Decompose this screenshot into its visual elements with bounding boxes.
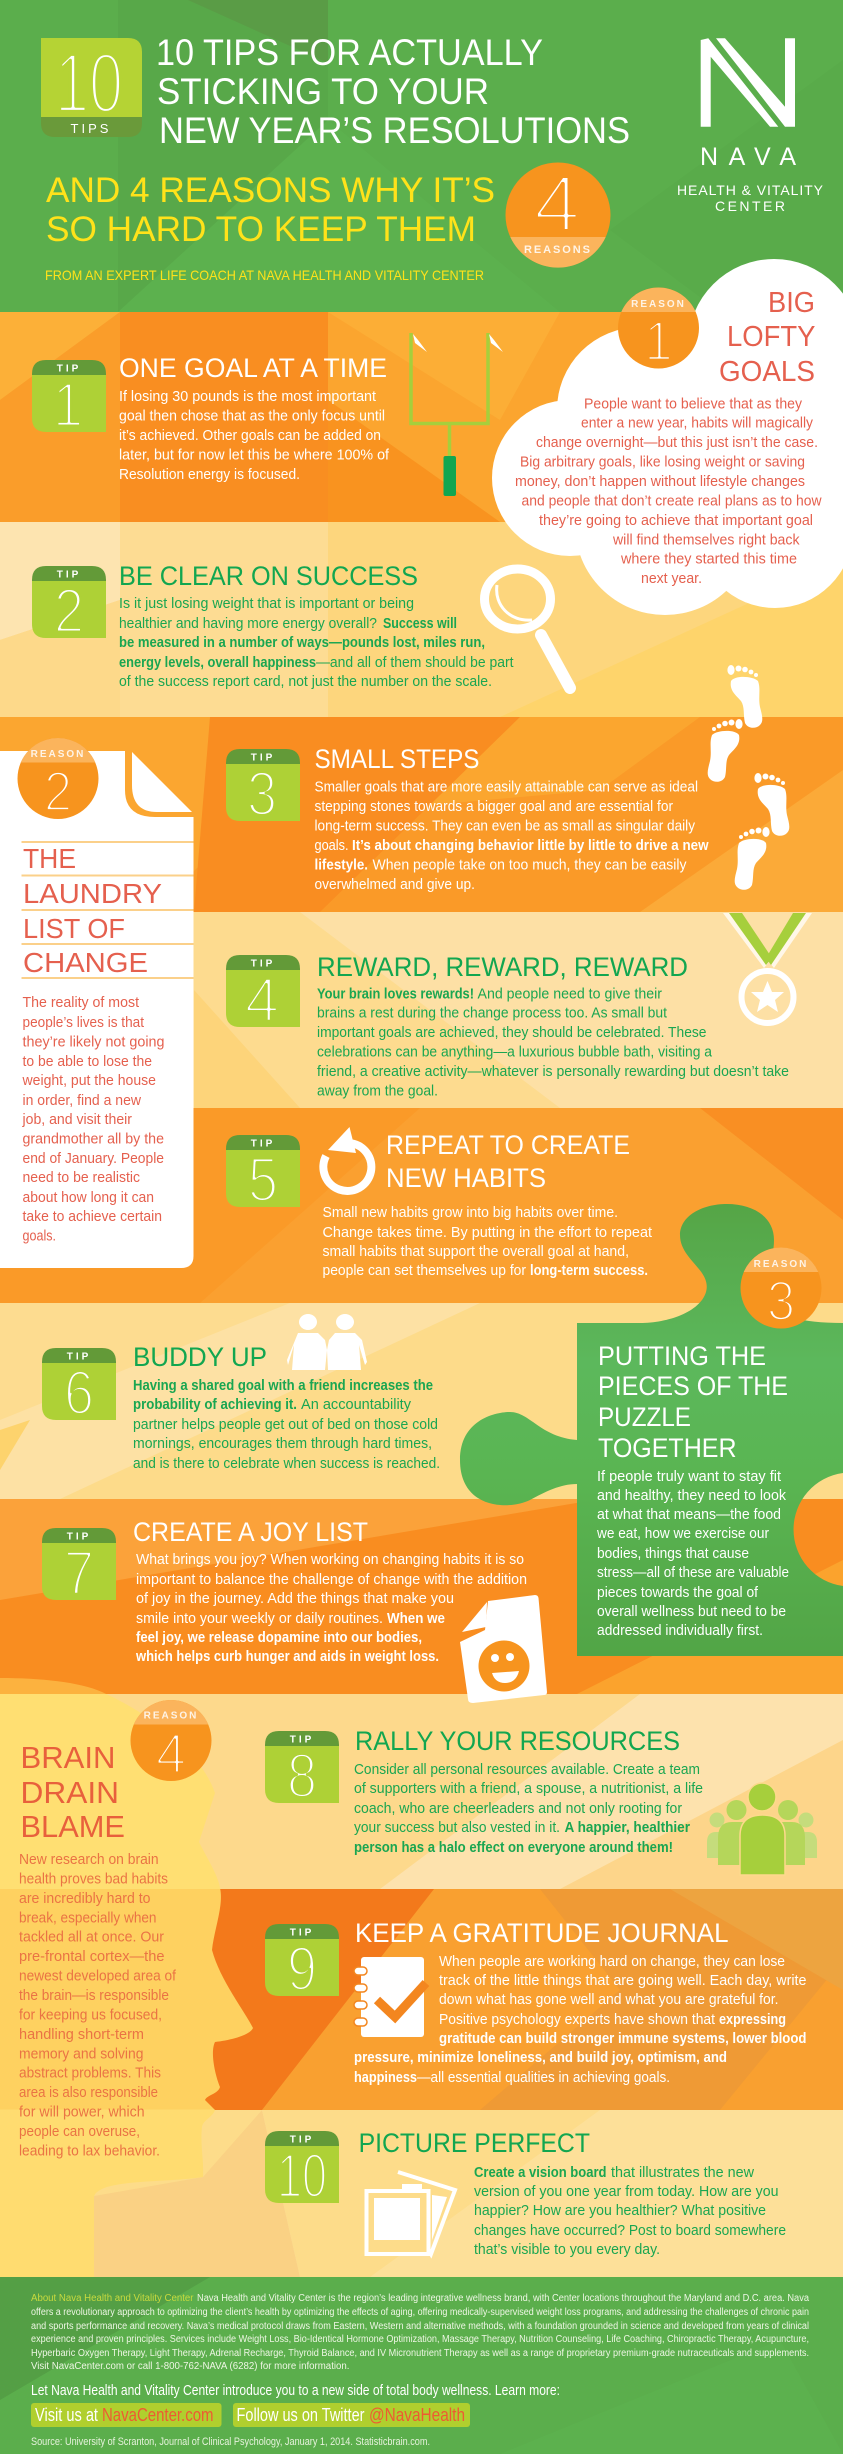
panel: tip 8 bbox=[265, 1726, 817, 1875]
reason 2 title: THE bbox=[23, 843, 76, 874]
byline: FROM AN EXPERT LIFE COACH AT NAVA HEALTH AND VITALITY CENTER bbox=[45, 267, 484, 283]
reason 4 text: for will power, which bbox=[19, 2105, 145, 2121]
title bbox=[156, 32, 630, 151]
panel: footer bbox=[31, 2293, 809, 2448]
panel: tip 3 bbox=[226, 744, 709, 893]
reason 4 title: BRAIN bbox=[20, 1740, 116, 1775]
tip 2 text: Success will bbox=[383, 616, 457, 632]
tip 9 text: happiness bbox=[354, 2070, 417, 2086]
tip 8 tile: TIP bbox=[290, 1734, 314, 1746]
tip 2 tile bbox=[32, 566, 106, 646]
tip 3 tile bbox=[226, 749, 300, 829]
logo: Nava: HEALTH & VITALITY bbox=[677, 182, 824, 198]
logo: Nava: NAVA bbox=[700, 143, 796, 171]
tip 4 text: away from the goal. bbox=[317, 1083, 438, 1099]
panel: tip 9 bbox=[265, 1918, 806, 2086]
tip 6 text: mornings, encourages them through hard times, bbox=[133, 1436, 432, 1452]
reason 2 text: take to achieve certain bbox=[22, 1209, 162, 1225]
reason 2 badge bbox=[18, 738, 98, 822]
tip 7 text: which helps curb hunger and aids in weight loss. bbox=[135, 1649, 439, 1665]
tip 6 text: partner helps people get out of bed on those cold bbox=[133, 1417, 438, 1433]
tip 6 tile: TIP bbox=[67, 1352, 91, 1362]
tip 1 tile: TIP bbox=[57, 364, 81, 374]
tip 9 text: down what has gone well and what you are grateful for. bbox=[439, 1992, 778, 2008]
tip 8 text: coach, who are cheerleaders and not only rooting for bbox=[354, 1801, 682, 1817]
tip 1 text: Resolution energy is focused. bbox=[119, 467, 300, 483]
reason 3 title: PUTTING THE bbox=[598, 1341, 766, 1371]
tip 8 text: Consider all personal resources available. Create a team bbox=[354, 1762, 700, 1778]
tip 7 tile: TIP bbox=[67, 1532, 91, 1542]
reason 4 text: the brain—is responsible bbox=[19, 1988, 169, 2004]
subtitle bbox=[46, 171, 495, 249]
tip 7 text bbox=[135, 1552, 527, 1665]
source line: Source: University of Scranton, Journal of Clinical Psychology, January 1, 2014. Statisticbrain.com. bbox=[31, 2436, 430, 2448]
cloud title: LOFTY bbox=[727, 321, 816, 353]
tip 7 text: of joy in the journey. Add the things that make you bbox=[136, 1591, 454, 1607]
cloud body text: and people that don’t create real plans as to how bbox=[522, 494, 822, 510]
reason 2 title bbox=[23, 843, 162, 978]
tip 9 text: pressure, minimize loneliness, and build joy, optimism, and bbox=[354, 2050, 727, 2066]
cloud body text: money, don’t happen without lifestyle changes bbox=[515, 474, 805, 490]
tip 5 text: people can set themselves up for bbox=[322, 1263, 526, 1279]
tip 2 text: healthier and having more energy overall? bbox=[119, 616, 377, 632]
tip 6 heading: BUDDY UP bbox=[133, 1342, 267, 1372]
reason 3 text: If people truly want to stay fit bbox=[597, 1469, 781, 1485]
reason 2 text: to be able to lose the bbox=[22, 1054, 152, 1070]
tip 8 tile bbox=[265, 1731, 339, 1811]
icon: two buddies bbox=[287, 1314, 367, 1370]
reason 2 text: weight, put the house bbox=[22, 1073, 156, 1089]
reason 2 text: The reality of most bbox=[22, 995, 139, 1011]
button: follow on twitter: @NavaHealth bbox=[369, 2405, 465, 2425]
reason 2 text: in order, find a new bbox=[22, 1093, 142, 1109]
logo: Nava bbox=[677, 38, 824, 214]
panel: tip 7 bbox=[42, 1517, 547, 1703]
reason 2 text: job, and visit their bbox=[22, 1112, 132, 1128]
tip 6 tile: 6 bbox=[64, 1359, 94, 1428]
icon: smiley page bbox=[460, 1595, 547, 1703]
tip 8 text: person has a halo effect on everyone around them! bbox=[354, 1840, 673, 1856]
reason 3 text: stress—all of these are valuable bbox=[597, 1565, 789, 1581]
tip 4 text: Your brain loves rewards! bbox=[317, 986, 474, 1002]
tip 9 text: gratitude can build stronger immune systems, lower blood bbox=[439, 2031, 806, 2047]
subtitle: SO HARD TO KEEP THEM bbox=[46, 210, 476, 249]
tip 6 text bbox=[133, 1378, 440, 1472]
about text: About Nava Health and Vitality Center bbox=[31, 2293, 194, 2304]
tip 5 text: long-term success. bbox=[530, 1263, 648, 1279]
tip 5 heading bbox=[386, 1130, 630, 1193]
icon: 10 tips tile: 10 bbox=[55, 36, 123, 130]
tip 3 text: Smaller goals that are more easily attainable can serve as ideal bbox=[314, 780, 698, 796]
tip 5 tile bbox=[226, 1135, 300, 1215]
tip 4 text: brains a rest during the change process too. As small but bbox=[317, 1006, 667, 1022]
panel: tip 2 bbox=[32, 561, 570, 690]
tip 10 text: happier? How are you healthier? What positive bbox=[474, 2203, 766, 2219]
tip 3 text: overwhelmed and give up. bbox=[314, 877, 475, 893]
reason 4 title: DRAIN bbox=[20, 1775, 119, 1810]
tip 5 text bbox=[322, 1205, 652, 1279]
tip 10 heading: PICTURE PERFECT bbox=[359, 2128, 590, 2158]
reason 3 title: TOGETHER bbox=[598, 1433, 736, 1463]
about text: Visit NavaCenter.com or call 1-800-762-NAVA (6282) for more information. bbox=[31, 2361, 350, 2372]
icon: repeat arrow bbox=[323, 1127, 371, 1191]
tip 1 text: later, but for now let this be where 100% of bbox=[119, 448, 390, 464]
tip 2 tile: TIP bbox=[57, 570, 81, 580]
tip 10 text: Create a vision board bbox=[474, 2165, 606, 2181]
logo: Nava: CENTER bbox=[715, 198, 785, 214]
reason 3 text: bodies, things that cause bbox=[597, 1546, 749, 1562]
tip 3 text bbox=[314, 780, 709, 893]
tip 10 text: that illustrates the new bbox=[611, 2165, 755, 2181]
tip 9 text: Positive psychology experts have shown that bbox=[439, 2012, 715, 2028]
panel: tip 4 bbox=[226, 913, 812, 1099]
reason 3 text: pieces towards the goal of bbox=[597, 1585, 759, 1601]
reason 3 badge: 3 bbox=[767, 1269, 795, 1332]
header bbox=[41, 32, 824, 283]
tip 3 text: lifestyle. bbox=[314, 858, 368, 874]
tip 9 tile bbox=[265, 1924, 339, 2004]
cloud body text: they’re going to achieve that important goal bbox=[539, 513, 813, 529]
cloud shape bbox=[492, 259, 843, 615]
tip 7 text: feel joy, we release dopamine into our bodies, bbox=[136, 1630, 422, 1646]
tip 1 text: it’s achieved. Other goals can be added on bbox=[119, 428, 381, 444]
tip 9 text: track of the little things that are going well. Each day, write bbox=[439, 1973, 806, 1989]
tip 4 tile: TIP bbox=[251, 958, 275, 970]
tip 2 text: Is it just losing weight that is important or being bbox=[119, 596, 414, 612]
tip 4 text bbox=[317, 986, 789, 1099]
reason 4 badge: REASON bbox=[144, 1710, 198, 1722]
tip 9 heading: KEEP A GRATITUDE JOURNAL bbox=[355, 1918, 728, 1948]
tip 7 tile bbox=[42, 1528, 116, 1608]
reason 4 badge: 4 bbox=[156, 1722, 186, 1784]
footprint 4 bbox=[735, 827, 770, 890]
tip 9 text: expressing bbox=[719, 2012, 786, 2028]
reason 1 badge bbox=[618, 288, 699, 372]
reason 2 text: end of January. People bbox=[22, 1151, 164, 1167]
button: visit website: Visit us at bbox=[35, 2405, 98, 2425]
tip 7 tile: 7 bbox=[64, 1539, 94, 1608]
reason 4 text: New research on brain bbox=[19, 1852, 159, 1868]
tip 6 tile bbox=[42, 1348, 116, 1428]
reason 3 text: addressed individually first. bbox=[597, 1623, 763, 1639]
icon: 10 tips tile: TIPS bbox=[71, 121, 111, 136]
footprint 3 bbox=[754, 773, 789, 836]
cloud body text: enter a new year, habits will magically bbox=[581, 416, 814, 432]
tip 5 heading: NEW HABITS bbox=[386, 1163, 546, 1193]
tip 7 text: When we bbox=[387, 1611, 445, 1627]
tip 6 text: probability of achieving it. bbox=[133, 1397, 297, 1413]
tip 3 tile: 3 bbox=[247, 760, 277, 829]
tip 3 text: It’s about changing behavior little by little to drive a new bbox=[352, 838, 709, 854]
tip 10 tile bbox=[265, 2131, 339, 2211]
tip 4 text: important goals are achieved, they should be celebrated. These bbox=[317, 1025, 706, 1041]
subtitle: AND 4 REASONS WHY IT’S bbox=[46, 171, 495, 210]
puzzle shape bbox=[460, 1204, 843, 1656]
tip 7 text: important to balance the challenge of change with the addition bbox=[136, 1572, 527, 1588]
tip 4 heading: REWARD, REWARD, REWARD bbox=[317, 952, 688, 982]
icon: footprints bbox=[708, 665, 789, 890]
reason 2 title: CHANGE bbox=[23, 947, 148, 978]
cloud title: BIG bbox=[768, 287, 815, 319]
about text: Nava Health and Vitality Center is the region’s leading integrative wellness brand, with Center locations throughout the Maryland and D.C. area. Nava bbox=[197, 2293, 809, 2304]
title: 10 TIPS FOR ACTUALLY bbox=[156, 32, 543, 73]
cloud body text: Big arbitrary goals, like losing weight or saving bbox=[520, 455, 805, 471]
reason 2 text: they’re likely not going bbox=[22, 1034, 164, 1050]
tip 2 heading: BE CLEAR ON SUCCESS bbox=[119, 561, 418, 591]
icon: team of people bbox=[707, 1783, 817, 1875]
icon: 4 reasons circle: 4 bbox=[534, 159, 580, 248]
icon: 4 reasons circle: REASONS bbox=[524, 244, 590, 256]
reason 2 text: about how long it can bbox=[22, 1190, 154, 1206]
reason 4 text: people can overuse, bbox=[19, 2124, 140, 2140]
reason 3 badge bbox=[740, 1248, 822, 1332]
tip 7 text: smile into your weekly or daily routines. bbox=[136, 1611, 383, 1627]
footprint 1 bbox=[727, 665, 762, 728]
cloud body text: where they started this time bbox=[620, 552, 797, 568]
paper sheet bbox=[0, 751, 194, 1268]
tip 3 text: long-term success. They can even be as small as singular daily bbox=[314, 818, 696, 834]
reason 2 badge: 2 bbox=[44, 760, 72, 822]
reason 4 text: area is also responsible bbox=[19, 2085, 158, 2101]
reason 2 title: LIST OF bbox=[23, 913, 125, 944]
tip 1 heading: ONE GOAL AT A TIME bbox=[119, 353, 387, 383]
about text bbox=[31, 2293, 809, 2372]
panel: brain drain head silhouette bbox=[0, 1678, 300, 2277]
reason 4 title bbox=[20, 1740, 125, 1844]
tip 8 text: of supporters with a friend, a spouse, a nutritionist, a life bbox=[354, 1781, 703, 1797]
reason 4 text: leading to lax behavior. bbox=[19, 2143, 160, 2159]
tip 1 tile bbox=[32, 360, 106, 440]
learn more line: Let Nava Health and Vitality Center introduce you to a new side of total body wellness. Learn more: bbox=[31, 2382, 560, 2399]
panel: reason 2 laundry list bbox=[0, 738, 194, 1268]
panel: reason 1 cloud bbox=[492, 259, 843, 615]
cloud body text: change overnight—but this just isn’t the case. bbox=[536, 435, 818, 451]
reason 3 text bbox=[596, 1469, 789, 1639]
tip 8 text: your success but also vested in it. bbox=[354, 1820, 560, 1836]
tip 9 text: When people are working hard on change, they can lose bbox=[439, 1954, 785, 1970]
tip 5 tile: 5 bbox=[248, 1146, 278, 1215]
tip 1 text: goal then chose that as the only focus until bbox=[119, 408, 385, 424]
cloud body text: next year. bbox=[641, 571, 702, 587]
title: STICKING TO YOUR bbox=[157, 71, 489, 112]
tip 5 text: small habits that support the overall goal at hand, bbox=[322, 1244, 629, 1260]
icon: journal with checkmark bbox=[354, 1957, 426, 2037]
tip 2 text bbox=[119, 596, 514, 690]
button: follow on twitter bbox=[233, 2403, 470, 2427]
reason 3 title: PUZZLE bbox=[598, 1402, 691, 1432]
icon: magnifying glass bbox=[484, 569, 570, 688]
reason 4 text: newest developed area of bbox=[19, 1969, 177, 1985]
button: visit website: NavaCenter.com bbox=[102, 2405, 214, 2425]
reason 3 title bbox=[598, 1341, 788, 1463]
reason 4 text bbox=[19, 1852, 177, 2159]
tip 4 tile: 4 bbox=[245, 966, 279, 1035]
footprint 2 bbox=[708, 719, 743, 782]
tip 10 tile: TIP bbox=[290, 2134, 314, 2146]
tip 3 heading: SMALL STEPS bbox=[314, 744, 480, 774]
tip 8 text bbox=[354, 1762, 703, 1856]
tip 3 text: goals. bbox=[314, 838, 348, 854]
cloud title: GOALS bbox=[719, 356, 815, 388]
reason 1 badge: 1 bbox=[644, 309, 672, 372]
tip 4 tile bbox=[226, 955, 300, 1035]
tip 2 text: of the success report card, not just the number on the scale. bbox=[119, 674, 492, 690]
button: visit website bbox=[31, 2403, 222, 2427]
reason 2 text: goals. bbox=[22, 1228, 56, 1244]
tip 1 tile: 1 bbox=[53, 371, 83, 440]
tip 1 text: If losing 30 pounds is the most important bbox=[119, 389, 376, 405]
tip 7 text: What brings you joy? When working on changing habits it is so bbox=[136, 1552, 524, 1568]
tip 8 heading: RALLY YOUR RESOURCES bbox=[355, 1726, 680, 1756]
reason 3 title: PIECES OF THE bbox=[598, 1371, 788, 1401]
tip 2 text: be measured in a number of ways—pounds lost, miles run, bbox=[119, 635, 485, 651]
tip 6 text: An accountability bbox=[301, 1397, 412, 1413]
reason 3 badge: REASON bbox=[754, 1259, 808, 1270]
tip 3 text: stepping stones towards a bigger goal and are essential for bbox=[314, 799, 673, 815]
reason 4 text: health proves bad habits bbox=[19, 1871, 168, 1887]
panel: tip 1 bbox=[32, 333, 503, 496]
reason 4 text: are incredibly hard to bbox=[19, 1891, 150, 1907]
title: NEW YEAR’S RESOLUTIONS bbox=[159, 110, 630, 151]
cloud body text: will find themselves right back bbox=[612, 532, 800, 548]
panel: reason 4 brain drain bbox=[19, 1700, 212, 2159]
tip 6 text: and is there to celebrate when success is reached. bbox=[133, 1456, 440, 1472]
reason 4 text: handling short-term bbox=[19, 2027, 144, 2043]
tip 3 tile: TIP bbox=[251, 752, 275, 764]
reason 3 text: and healthy, they need to look bbox=[597, 1488, 787, 1504]
reason 4 text: tackled all at once. Our bbox=[19, 1930, 164, 1946]
tip 7 heading: CREATE A JOY LIST bbox=[133, 1517, 368, 1547]
tip 6 text: Having a shared goal with a friend increases the bbox=[133, 1378, 433, 1394]
cloud body text bbox=[515, 396, 822, 587]
tip 8 text: A happier, healthier bbox=[564, 1820, 690, 1836]
tip 10 tile: 10 bbox=[277, 2142, 327, 2211]
panel: tip 5 bbox=[226, 1127, 652, 1279]
icon: goal post bbox=[411, 333, 503, 496]
cloud body text: People want to believe that as they bbox=[584, 396, 803, 412]
reason 4 badge bbox=[130, 1700, 212, 1784]
reason 3 text: overall wellness but need to be bbox=[597, 1604, 786, 1620]
tip 9 tile: TIP bbox=[290, 1928, 314, 1938]
reason 2 text bbox=[22, 995, 164, 1244]
tip 10 text: version of you one year from today. How are you bbox=[474, 2184, 778, 2200]
reason 2 text: grandmother all by the bbox=[22, 1132, 164, 1148]
tip 9 tile: 9 bbox=[287, 1935, 317, 2004]
panel: reason 3 puzzle bbox=[460, 1204, 843, 1656]
tip 2 text: —and all of them should be part bbox=[316, 655, 514, 671]
tip 10 text: that’s visible to you every day. bbox=[474, 2242, 660, 2258]
icon: medal bbox=[723, 913, 812, 1023]
button: follow on twitter: Follow us on Twitter bbox=[236, 2405, 365, 2425]
tip 2 tile: 2 bbox=[54, 577, 84, 646]
list rules bbox=[22, 841, 194, 979]
panel: tip 10 bbox=[265, 2128, 786, 2258]
reason 4 text: break, especially when bbox=[19, 1910, 156, 1926]
reason 2 text: need to be realistic bbox=[22, 1170, 140, 1186]
reason 3 text: at what that means—the food bbox=[597, 1507, 781, 1523]
tip 5 text: Change takes time. By putting in the effort to repeat bbox=[322, 1225, 652, 1241]
tip 9 text: —all essential qualities in achieving goals. bbox=[417, 2070, 670, 2086]
reason 2 text: people’s lives is that bbox=[22, 1015, 144, 1031]
reason 4 text: abstract problems. This bbox=[19, 2066, 161, 2082]
reason 4 text: for keeping us focused, bbox=[19, 2007, 162, 2023]
reason 2 title: LAUNDRY bbox=[23, 878, 162, 909]
tip 8 tile: 8 bbox=[287, 1742, 317, 1811]
tip 1 text bbox=[119, 389, 390, 483]
reason 4 text: pre-frontal cortex—the bbox=[19, 1949, 164, 1965]
tip 4 text: celebrations can be anything—a luxurious bubble bath, visiting a bbox=[317, 1045, 713, 1061]
reason 2 badge: REASON bbox=[31, 749, 85, 760]
tip 10 text bbox=[474, 2165, 786, 2258]
tip 5 text: Small new habits grow into big habits over time. bbox=[322, 1205, 618, 1221]
tip 9 text bbox=[354, 1954, 806, 2086]
reason 1 badge: REASON bbox=[631, 299, 686, 310]
tip 3 text: When people take on too much, they can be easily bbox=[372, 858, 687, 874]
icon: 4 reasons circle bbox=[506, 159, 610, 268]
reason 4 title: BLAME bbox=[20, 1809, 125, 1844]
tip 4 text: And people need to give their bbox=[478, 986, 662, 1002]
tip 10 text: changes have occurred? Post to board somewhere bbox=[474, 2223, 786, 2239]
tip 5 heading: REPEAT TO CREATE bbox=[386, 1130, 630, 1160]
panel: tip 6 bbox=[42, 1314, 440, 1472]
cloud title bbox=[719, 287, 816, 388]
tip 5 tile: TIP bbox=[251, 1138, 275, 1150]
tip 4 text: friend, a creative activity—whatever is personally rewarding but doesn’t take bbox=[317, 1064, 789, 1080]
reason 3 text: we eat, how we exercise our bbox=[596, 1526, 769, 1542]
tip 2 text: energy levels, overall happiness bbox=[119, 655, 316, 671]
reason 4 text: memory and solving bbox=[19, 2046, 144, 2062]
icon: photos bbox=[366, 2172, 455, 2254]
